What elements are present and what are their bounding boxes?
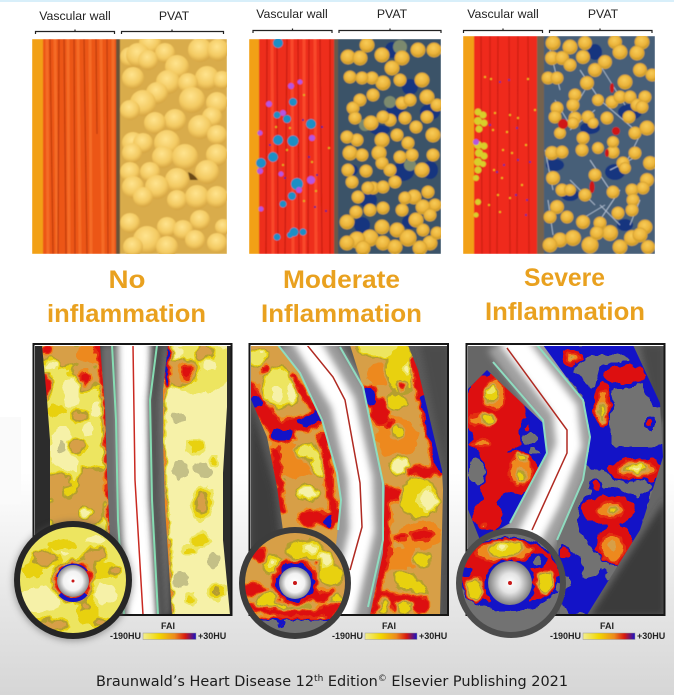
footer citation: Braunwald’s Heart Disease 12 xyxy=(96,674,314,690)
label: PVAT: PVAT xyxy=(588,7,619,21)
legend: FAI scale xyxy=(332,621,447,641)
heading: severe inflammation xyxy=(485,264,645,326)
frame xyxy=(250,344,448,615)
panel: no inflammation illustration xyxy=(32,9,231,258)
panel: moderate inflammation illustration xyxy=(249,7,443,255)
bracket: vascular wall xyxy=(253,28,332,33)
bracket: PVAT xyxy=(122,30,224,34)
inset: cross section xyxy=(456,528,566,638)
inset: cross section xyxy=(239,527,351,639)
immune cells: blue xyxy=(256,38,316,240)
legend: FAI scale: +30HU xyxy=(419,631,447,641)
bracket: PVAT xyxy=(339,28,441,33)
panel: FAI map no inflammation xyxy=(10,335,240,641)
label: PVAT: PVAT xyxy=(159,9,190,23)
legend: FAI scale: +30HU xyxy=(198,631,226,641)
yellow cell cluster in wall xyxy=(473,108,488,218)
legend: FAI scale: FAI xyxy=(600,621,614,631)
legend: FAI scale xyxy=(110,621,226,641)
label: vascular wall: Vascular wall xyxy=(256,7,328,21)
heading: no inflammation: inflammation xyxy=(47,300,206,328)
bracket: vascular wall xyxy=(36,30,114,34)
footer citation: Elsevier Publishing 2021 xyxy=(387,674,568,690)
bracket: PVAT xyxy=(550,28,652,33)
legend: FAI scale: -190HU xyxy=(332,631,363,641)
legend: FAI scale: +30HU xyxy=(637,631,665,641)
inset: cross section xyxy=(10,520,136,641)
bracket: vascular wall xyxy=(464,28,542,33)
panel: FAI map moderate inflammation xyxy=(235,335,455,649)
heading: moderate inflammation: Moderate xyxy=(283,266,400,294)
red cells xyxy=(558,83,620,193)
heading: severe inflammation: Inflammation xyxy=(485,298,645,326)
adipocytes xyxy=(340,38,443,255)
illustration: inflamed vessel wall and fat xyxy=(249,38,443,255)
frame xyxy=(34,344,232,615)
illustration: vessel wall and fat xyxy=(32,32,231,258)
legend: FAI scale xyxy=(550,621,665,641)
label: vascular wall: Vascular wall xyxy=(467,7,539,21)
footer citation: © xyxy=(378,674,387,684)
legend: FAI scale: FAI xyxy=(382,621,396,631)
adipocytes xyxy=(542,35,658,254)
legend: FAI scale: -190HU xyxy=(550,631,581,641)
heading: no inflammation: No xyxy=(108,266,146,294)
legend: FAI scale: -190HU xyxy=(110,631,141,641)
legend: FAI scale: FAI xyxy=(161,621,175,631)
illustration: severely inflamed vessel wall and fat xyxy=(463,35,658,254)
heading: moderate inflammation: Inflammation xyxy=(261,300,422,328)
heading: moderate inflammation xyxy=(261,266,422,328)
label: PVAT: PVAT xyxy=(377,7,408,21)
heading: no inflammation xyxy=(47,266,206,328)
panel: severe inflammation illustration xyxy=(463,7,658,254)
footer citation: th xyxy=(314,674,323,684)
panel: FAI map severe inflammation xyxy=(456,343,666,640)
frame xyxy=(466,344,664,615)
label: vascular wall: Vascular wall xyxy=(39,9,111,23)
footer citation: Edition xyxy=(323,674,378,690)
heading: severe inflammation: Severe xyxy=(524,264,605,292)
immune cells: purple xyxy=(257,80,315,212)
